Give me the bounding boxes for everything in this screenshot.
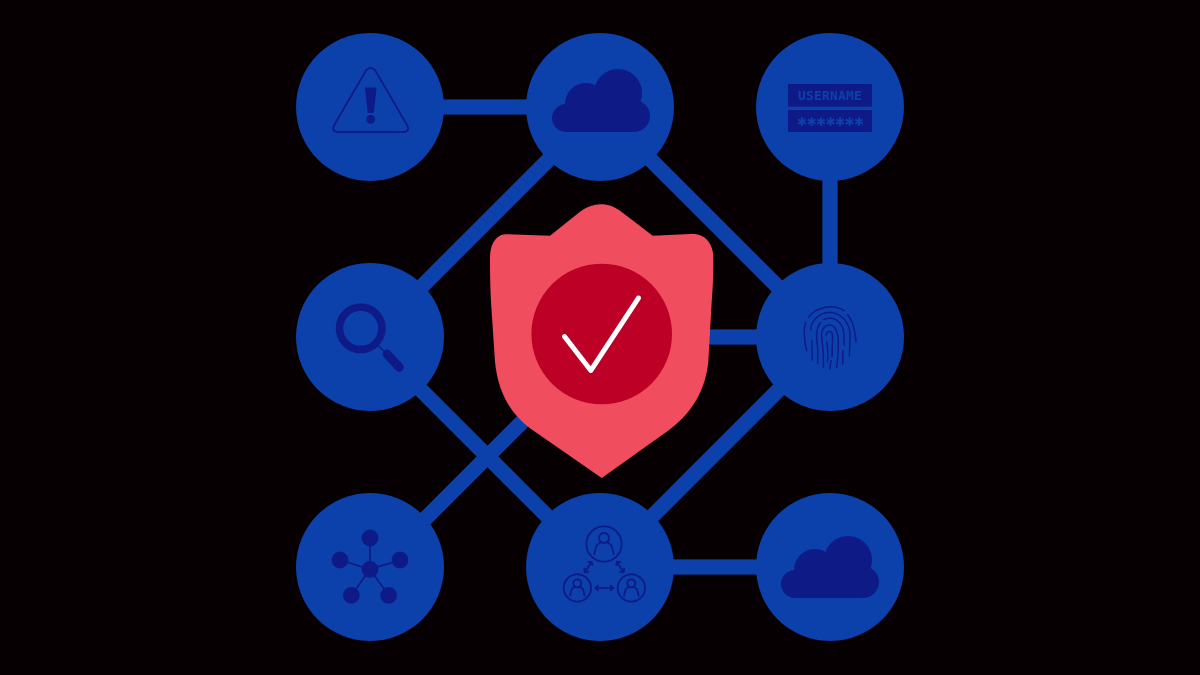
node: search	[296, 263, 444, 411]
node: cloud bottom	[756, 493, 904, 641]
icon: cloud	[552, 69, 650, 132]
icon: connected users	[564, 526, 645, 602]
icon: warning triangle	[333, 68, 408, 132]
check mark	[564, 298, 638, 370]
red disc	[531, 264, 672, 404]
network connector lines	[370, 107, 830, 574]
icon: username field: USERNAME	[798, 89, 862, 104]
icon: hub and spokes	[332, 530, 408, 604]
node: login	[756, 33, 904, 181]
icon: cloud	[781, 536, 879, 598]
shield with check mark	[490, 204, 713, 478]
icon: magnifier	[340, 307, 399, 367]
icon: username field	[788, 84, 872, 107]
node: users	[526, 493, 674, 641]
icon: password field	[788, 110, 872, 132]
node: warning	[296, 33, 444, 181]
shield body	[490, 204, 713, 478]
icon: password field: ✱✱✱✱✱✱✱	[797, 115, 864, 129]
icon: fingerprint	[804, 307, 856, 369]
node: fingerprint	[756, 263, 904, 411]
node: network hub	[296, 493, 444, 641]
node: cloud top	[526, 33, 674, 181]
